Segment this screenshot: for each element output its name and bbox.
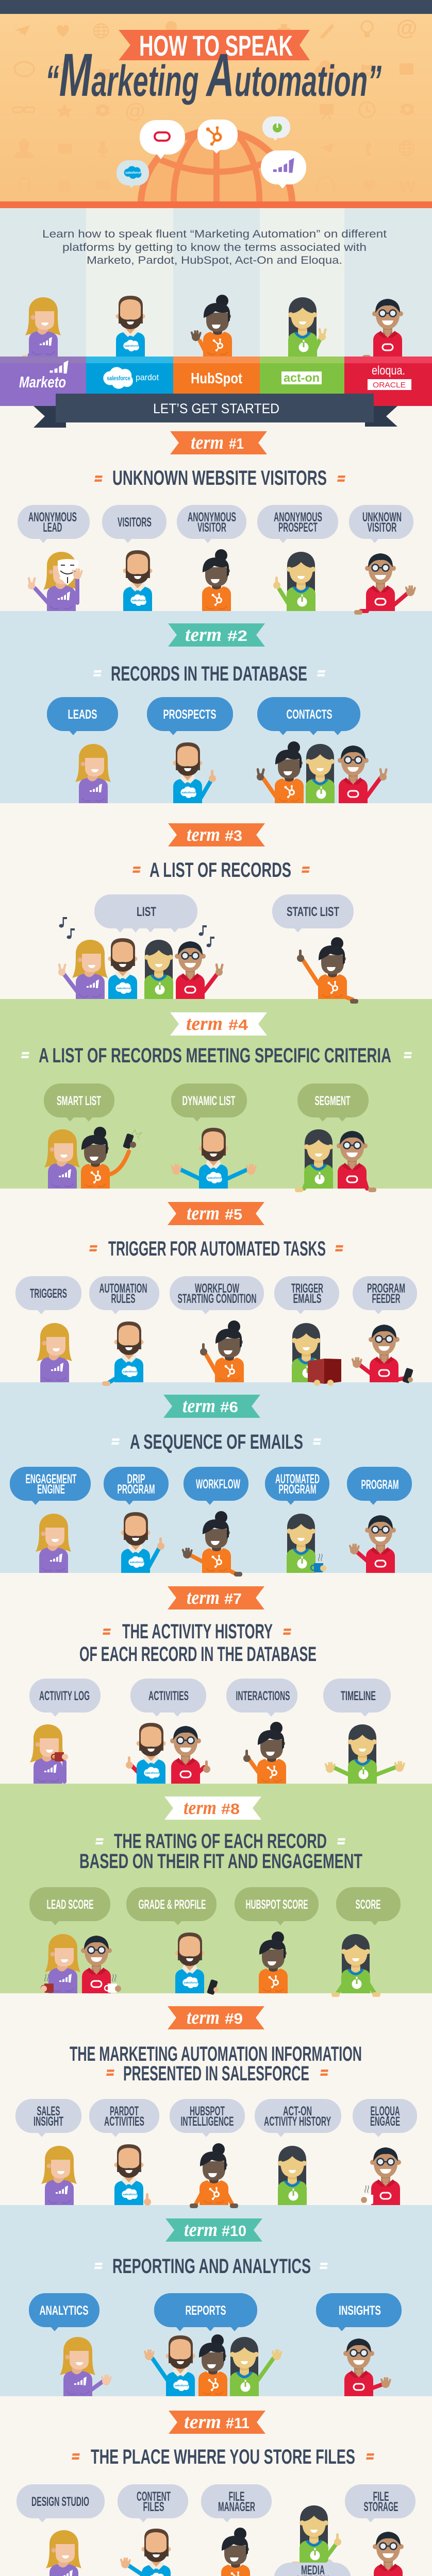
heading 7: THE ACTIVITY HISTORY: [122, 1620, 273, 1643]
term badge 5: [168, 1202, 264, 1225]
panel: intro stripes: [0, 208, 432, 357]
character: Marketo person: [46, 2530, 81, 2576]
term badge 8: #8: [221, 1801, 240, 1818]
character: Marketo person: [37, 1323, 72, 1382]
logo: Salesforce Pardot: salesforce: [107, 376, 130, 382]
bubble: dynamic list: DYNAMIC LIST: [182, 1094, 235, 1108]
section: term 1: [18, 431, 416, 615]
heading 10: [94, 2255, 328, 2278]
character: Marketo person: [75, 744, 111, 803]
bubble: sales insight: INSIGHT: [34, 2114, 63, 2129]
term badge 1: [170, 431, 267, 454]
bubble: hubspot intelligence: HUBSPOT: [190, 2104, 225, 2119]
bubble: segment: SEGMENT: [314, 1094, 351, 1108]
top dark bar: [0, 0, 432, 14]
panel: term 11 background: [0, 2396, 432, 2576]
character: Act-On person with coffee: [287, 1514, 326, 1573]
character: Eloqua person: [354, 553, 416, 615]
header background icons: W: [399, 177, 416, 197]
bubble: engagement engine: ENGAGEMENT: [26, 1472, 76, 1486]
character: HubSpot person pointing: [243, 1722, 286, 1784]
intro team of five characters: [22, 295, 403, 360]
bubble: hubspot intelligence: [170, 2099, 245, 2137]
section: term 6: [10, 1395, 412, 1577]
bubble: static list: [272, 894, 354, 933]
panel: term 2 background: [0, 611, 432, 803]
bubble: automation rules: RULES: [111, 1292, 135, 1306]
bubble: workflow starting condition: STARTING CONDITION: [177, 1292, 257, 1306]
heading 5: [89, 1238, 343, 1260]
bubble: anonymous visitor: ANONYMOUS: [188, 510, 236, 524]
bubble: interactions: INTERACTIONS: [236, 1689, 290, 1703]
character: Pardot person: [102, 1321, 143, 1386]
term badge 4: #4: [228, 1017, 248, 1033]
character: Pardot person pointing: [173, 742, 216, 803]
banner: let's get started: [34, 394, 397, 428]
title ribbon: How to Speak: HOW TO SPEAK: [139, 29, 293, 62]
header background icons: t: [365, 138, 372, 160]
section: term 11: [16, 2411, 416, 2576]
term badge 5: #5: [225, 1207, 242, 1223]
section: term 2: [47, 623, 388, 803]
section: term 10: [29, 2218, 402, 2396]
character: Pardot person arms out: [171, 1128, 257, 1189]
bubble: pardot activities: PARDOT: [110, 2104, 139, 2119]
bubble: drip program: PROGRAM: [118, 1482, 155, 1497]
character: Marketo person with mask: [27, 552, 83, 611]
bubble: triggers: TRIGGERS: [30, 1286, 67, 1301]
heading 10: REPORTING AND ANALYTICS: [112, 2255, 311, 2278]
term badge 2: term: [185, 624, 222, 646]
bubble: engagement engine: ENGINE: [37, 1482, 65, 1497]
term badge 6: #6: [220, 1399, 238, 1416]
bubble: design studio: DESIGN STUDIO: [31, 2495, 89, 2509]
term badge 9: [168, 2006, 264, 2029]
heading 3: A LIST OF RECORDS: [149, 859, 291, 882]
term badge 11: #11: [226, 2415, 250, 2432]
character: HubSpot person pointing: [200, 1320, 244, 1382]
logo: Marketo: Marketo: [19, 373, 66, 391]
bubble: program feeder: FEEDER: [372, 1292, 400, 1306]
bubble: sales insight: [15, 2099, 81, 2137]
intro text: Learn how to speak fluent “Marketing Automation” on different: [42, 228, 387, 240]
term badge 8: term: [184, 1797, 217, 1819]
bubble: eloqua engage: ELOQUA: [370, 2104, 400, 2119]
bubble: pardot activities: [89, 2099, 159, 2137]
bubble: trigger emails: EMAILS: [293, 1292, 322, 1306]
bubble: contacts: CONTACTS: [287, 707, 332, 722]
bubble: sales insight: SALES: [37, 2104, 60, 2119]
character: Eloqua person with phone: [351, 1325, 413, 1383]
character: Pardot person: [120, 2529, 183, 2576]
bubble: unknown visitor: UNKNOWN: [362, 510, 402, 524]
term badge 1: #1: [229, 436, 244, 452]
heading 9: [70, 2043, 362, 2085]
bubble: program: [347, 1467, 412, 1505]
bubble: leads: LEADS: [68, 707, 97, 722]
panel: term 3 background: [0, 803, 432, 999]
bubble: timeline: [323, 1679, 391, 1717]
character: Marketo person with mug: [30, 1724, 68, 1784]
logo: Marketo: [19, 361, 68, 391]
character: Act-On person above the media library bubble: [291, 2505, 341, 2566]
heading 9: PRESENTED IN SALESFORCE: [123, 2062, 309, 2085]
section: term 3: [58, 823, 358, 1004]
bubble: reports: [154, 2293, 257, 2331]
bubble: insights: [316, 2293, 402, 2331]
bubble: eloqua engage: [353, 2099, 417, 2137]
bubble: analytics: [29, 2293, 99, 2331]
logo: Act-On: act-on: [284, 371, 320, 384]
bubble: grade & profile: GRADE & PROFILE: [138, 1897, 206, 1912]
term badge 2: [168, 623, 265, 647]
term badge 4: term: [186, 1013, 223, 1035]
bubble: drip program: [104, 1467, 169, 1505]
bubble: dynamic list: [171, 1083, 247, 1122]
section: term 8: [29, 1797, 401, 1997]
bubble: segment: [297, 1083, 369, 1122]
section: term 5: [15, 1202, 417, 1386]
icon: music notes: [59, 917, 214, 947]
character: HubSpot person waving: [181, 1511, 242, 1577]
bubble: act-on activity history: [255, 2099, 341, 2137]
panel: term 7 background: [0, 1573, 432, 1784]
characters: Marketo and HubSpot selfie: [44, 1127, 142, 1189]
bubble: anonymous prospect: ANONYMOUS: [274, 510, 322, 524]
bubble: act-on activity history: ACTIVITY HISTORY: [264, 2114, 331, 2129]
bubble: automated program: PROGRAM: [278, 1482, 317, 1497]
bubble: automated program: AUTOMATED: [275, 1472, 320, 1486]
character: Act-On person: [278, 2146, 307, 2205]
term badge 11: term: [184, 2411, 221, 2433]
character: Pardot person thumbs up: [114, 2144, 151, 2206]
bubble: file storage: FILE: [373, 2489, 389, 2504]
bubble: anonymous lead: [18, 505, 90, 543]
term badge 5: term: [187, 1202, 220, 1224]
icon: HubSpot speech bubble: [197, 120, 238, 154]
bubble: lead score: [29, 1887, 110, 1925]
section: term 4: [21, 1012, 412, 1192]
character: Act-On person arms out: [324, 1724, 405, 1784]
heading 1: UNKNOWN WEBSITE VISITORS: [112, 467, 327, 489]
platform logo band: [0, 357, 432, 406]
character: Eloqua person waving: [348, 1515, 396, 1573]
bubble: visitors: VISITORS: [118, 515, 152, 530]
bubble: activities: [130, 1679, 206, 1717]
character: Eloqua person with coffee: [361, 2147, 401, 2205]
section: term 7: [29, 1586, 405, 1784]
icon: Act-On speech bubble: [262, 116, 290, 141]
bubble: anonymous prospect: [257, 505, 338, 543]
bubble: insights: INSIGHTS: [339, 2303, 381, 2318]
term badge 6: term: [182, 1395, 215, 1417]
bubble: timeline: TIMELINE: [341, 1689, 376, 1703]
bubble: pardot activities: ACTIVITIES: [104, 2114, 144, 2129]
logo: Salesforce Pardot: pardot: [136, 372, 159, 382]
character: Act-On person with book: [292, 1323, 341, 1386]
orange divider bar: [0, 201, 432, 208]
term badge 3: term: [187, 824, 220, 845]
bubble: score: [336, 1887, 401, 1925]
section: term 9: [15, 2006, 417, 2208]
panel: term 1 background: [0, 394, 432, 611]
bubble: smart list: [44, 1083, 114, 1122]
icon: Salesforce speech bubble: [117, 160, 149, 188]
bubble: content files: FILES: [143, 2500, 164, 2514]
characters: HubSpot, Act-On and Eloqua group: [256, 741, 388, 803]
bubble: analytics: ANALYTICS: [39, 2303, 89, 2318]
bubble: prospects: [147, 697, 233, 735]
heading 7: [79, 1620, 317, 1666]
bubble: prospects: PROSPECTS: [163, 707, 217, 722]
bubble: hubspot score: [235, 1887, 319, 1925]
character: Act-On person hands on ledge: [331, 1934, 380, 1997]
character: Eloqua person: [373, 2532, 404, 2576]
bubble: automation rules: [89, 1276, 159, 1314]
term badge 11: [169, 2411, 265, 2434]
icon: Oracle speech bubble: [140, 120, 185, 159]
logo: Salesforce Pardot: [103, 367, 159, 389]
term badge 7: #7: [224, 1591, 242, 1607]
panel: term 8 background: [0, 1784, 432, 1993]
term badge 9: term: [187, 2007, 220, 2028]
panel: term 6 background: [0, 1382, 432, 1573]
logo: HubSpot: HubSpot: [191, 370, 242, 387]
characters: four singing team members: [58, 938, 224, 999]
bubble: visitors: [102, 505, 167, 543]
term badge 1: term: [191, 432, 224, 453]
character: Pardot person: [123, 550, 153, 611]
bubble: activity log: [29, 1679, 101, 1717]
title ribbon: How to Speak: [119, 29, 310, 62]
bubble: static list: STATIC LIST: [287, 905, 339, 919]
character: Pardot person pointing: [121, 1512, 164, 1573]
banner: let's get started: LET’S GET STARTED: [153, 401, 279, 416]
globe: [137, 129, 296, 201]
bubble: workflow: WORKFLOW: [196, 1477, 240, 1492]
characters: Act-On and Eloqua pair: [295, 1129, 376, 1192]
heading 2: [93, 663, 325, 685]
bubble: content files: [118, 2484, 188, 2522]
bubble: activities: ACTIVITIES: [148, 1689, 189, 1703]
bubble: engagement engine: [10, 1467, 91, 1505]
bubble: grade & profile: [126, 1887, 217, 1925]
character: Act-On person: [273, 552, 315, 611]
character: Marketo person: [36, 1514, 71, 1573]
term badge 4: [170, 1012, 267, 1036]
heading 2: RECORDS IN THE DATABASE: [111, 663, 307, 685]
bubble: score: SCORE: [356, 1897, 380, 1912]
bubble: leads: [47, 697, 118, 735]
bubble: list: [94, 894, 197, 933]
bubble: reports: REPORTS: [186, 2303, 226, 2318]
character: HubSpot person: [221, 2528, 250, 2576]
header background icons: [13, 15, 417, 197]
term badge 9: #9: [225, 2011, 243, 2027]
bubble: hubspot intelligence: INTELLIGENCE: [180, 2114, 234, 2129]
heading 8: THE RATING OF EACH RECORD: [114, 1830, 327, 1853]
bubble: triggers: [15, 1276, 81, 1314]
bubble: trigger emails: TRIGGER: [291, 1281, 323, 1296]
bubble: anonymous visitor: VISITOR: [197, 520, 226, 535]
panel: header background: [0, 14, 432, 201]
bubble: anonymous lead: ANONYMOUS: [28, 510, 77, 524]
icon: Salesforce speech bubble: salesforce: [125, 172, 141, 175]
character: Marketo person waving: [60, 2337, 112, 2396]
logo: Eloqua Oracle: [368, 364, 411, 390]
character: HubSpot person: [202, 549, 231, 611]
term badge 2: #2: [227, 628, 247, 645]
term badge 10: [165, 2218, 262, 2242]
bubble: anonymous visitor: [177, 505, 246, 543]
term badge 6: [163, 1395, 260, 1418]
bubble: unknown visitor: VISITOR: [367, 520, 397, 535]
bubble: anonymous lead: LEAD: [43, 520, 62, 535]
characters: Pardot and Eloqua pair thumbs up: [126, 1723, 210, 1784]
characters: Pardot, HubSpot and Act-On group: [143, 2334, 283, 2396]
bubble: contacts: [257, 697, 360, 735]
bubble: file storage: [345, 2484, 416, 2522]
bubble: lead score: LEAD SCORE: [46, 1897, 94, 1912]
character: Marketo person: [41, 2146, 77, 2205]
bubble: workflow: [184, 1467, 248, 1505]
bubble: anonymous prospect: PROSPECT: [278, 520, 318, 535]
logo: Eloqua Oracle: eloqua.: [372, 364, 405, 378]
panel: term 5 background: [0, 1189, 432, 1382]
term badge 8: [164, 1797, 261, 1820]
bubble: media library: [274, 2559, 351, 2576]
bubble: automation rules: AUTOMATION: [99, 1281, 147, 1296]
heading 8: [79, 1830, 362, 1873]
bubble: file storage: STORAGE: [364, 2500, 398, 2514]
term badge 10: #10: [222, 2223, 246, 2240]
bubble: smart list: SMART LIST: [57, 1094, 101, 1108]
term badge 10: term: [184, 2219, 218, 2241]
bubble: workflow starting condition: WORKFLOW: [195, 1281, 239, 1296]
characters: Marketo and Eloqua with coffee: [41, 1934, 121, 1993]
header background icons: @: [125, 99, 145, 122]
panel: term 10 background: [0, 2205, 432, 2396]
bubble: eloqua engage: ENGAGE: [370, 2114, 400, 2129]
bubble: trigger emails: [274, 1276, 339, 1314]
intro text: [42, 228, 387, 266]
bubble: act-on activity history: ACT-ON: [283, 2104, 312, 2119]
bubble: program feeder: [353, 1276, 417, 1314]
intro text: platforms by getting to know the terms associated with: [62, 242, 367, 253]
bubble: file manager: MANAGER: [218, 2500, 255, 2514]
panel: term 9 background: [0, 1993, 432, 2205]
bubble: interactions: [226, 1679, 297, 1717]
bubble: content files: CONTENT: [137, 2489, 171, 2504]
bubble: program: PROGRAM: [361, 1478, 399, 1492]
intro text: Marketo, Pardot, HubSpot, Act-On and Eloqua.: [87, 255, 342, 266]
bubble: file manager: FILE: [229, 2489, 244, 2504]
bubble: file manager: [201, 2484, 272, 2522]
panel: term 4 background: [0, 999, 432, 1189]
bubble: automated program: [265, 1467, 329, 1505]
bubble: activity log: ACTIVITY LOG: [39, 1689, 90, 1703]
term badge 3: #3: [225, 828, 242, 844]
bubble: workflow starting condition: [170, 1276, 264, 1314]
term badge 7: term: [187, 1587, 220, 1608]
term badge 7: [168, 1586, 264, 1609]
character: HubSpot person: [259, 1931, 288, 1993]
icon: Marketo speech bubble: [261, 150, 306, 189]
bubble: design studio: [16, 2484, 105, 2522]
bubble: unknown visitor: [349, 505, 413, 543]
heading 6: A SEQUENCE OF EMAILS: [130, 1431, 303, 1453]
character: HubSpot person pointing: [297, 937, 358, 1004]
character: Pardot person with phone: [175, 1933, 219, 1995]
character: Eloqua person: [343, 2338, 391, 2396]
logo: Eloqua Oracle: ORACLE: [373, 381, 406, 389]
term badge 3: [168, 823, 265, 846]
character: HubSpot person hands on ledge: [190, 2143, 238, 2208]
header background icons: @: [396, 15, 417, 40]
bubble: drip program: DRIP: [127, 1472, 145, 1486]
bubble: list: LIST: [137, 905, 156, 919]
bubble: hubspot score: HUBSPOT SCORE: [245, 1897, 308, 1912]
